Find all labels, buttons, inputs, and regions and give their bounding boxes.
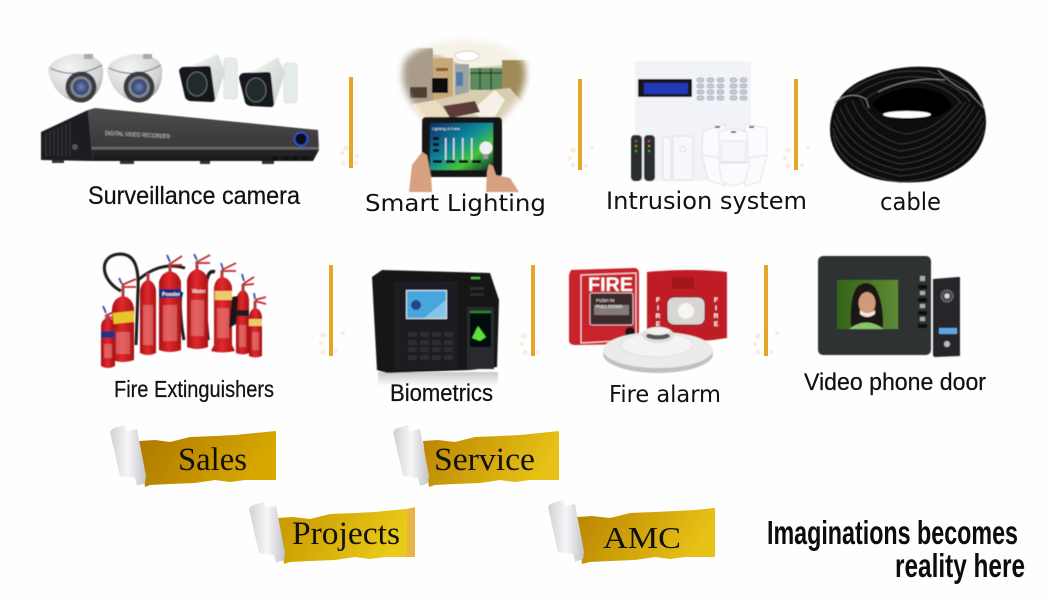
strobe horn (647, 270, 727, 342)
pull station (569, 268, 639, 345)
banner: Service (393, 425, 559, 487)
icon: dome camera 1 (48, 54, 103, 102)
strobe horn: R (656, 313, 661, 320)
strobe horn: F (714, 297, 718, 304)
caption: video phone door: Video phone door (804, 369, 986, 396)
banner: Projects: Projects (292, 516, 400, 552)
caption: intrusion system: Intrusion system (606, 187, 807, 215)
banner: AMC (548, 500, 715, 564)
icon: surveillance cameras and video recorder (41, 54, 319, 164)
banner: Projects (249, 502, 415, 564)
icon: intrusion alarm panel and sensors (631, 61, 767, 186)
extinguisher cylinders (101, 269, 262, 368)
door contact (663, 136, 693, 180)
strobe horn: I (715, 305, 717, 312)
room photo (398, 39, 530, 127)
caption: biometrics: Biometrics (390, 380, 493, 407)
pull station: PUSH IN (596, 298, 614, 303)
motion sensors (702, 124, 767, 186)
banner: Sales: Sales (178, 442, 247, 478)
icon: fire extinguishers (101, 254, 266, 368)
biometric keypad (408, 332, 453, 360)
icon: bullet camera 2 (239, 57, 297, 107)
alarm panel (635, 61, 751, 181)
divider 5 with bubbles (520, 265, 540, 356)
banner: Sales (110, 425, 276, 487)
strobe horn: F (656, 297, 660, 304)
caption: fire alarm: Fire alarm (609, 382, 721, 408)
tablet (422, 117, 502, 177)
icon: digital video recorder (41, 108, 319, 164)
remote fobs (631, 135, 655, 181)
extinguisher labels: Powder (162, 292, 180, 298)
icon: dome camera 2 (107, 54, 162, 102)
icon: fire alarm devices (569, 268, 727, 373)
icon: bullet camera 1 (179, 54, 237, 102)
pull station: FIRE (588, 275, 633, 296)
extinguisher necks and levers (103, 254, 266, 320)
banner: Service: Service (434, 442, 535, 478)
icon: digital video recorder: DIGITAL VIDEO RECORDER (105, 131, 171, 140)
extinguisher labels (101, 289, 262, 358)
hoses (104, 254, 215, 345)
pull station: PULL DOWN (596, 304, 623, 309)
strobe horn: I (657, 305, 659, 312)
caption: fire extinguishers: Fire Extinguishers (114, 376, 274, 402)
divider 3 with bubbles (783, 79, 810, 170)
biometric screen (406, 290, 447, 319)
monitor (818, 256, 931, 355)
tablet: Lighting & Fans (432, 126, 460, 131)
banner: AMC: AMC (603, 520, 681, 555)
extinguisher labels: Water (192, 289, 206, 295)
icon: smart lighting room and tablet (395, 35, 535, 192)
smoke detector (603, 327, 713, 373)
caption: cable: cable (880, 188, 941, 216)
strobe horn: E (714, 321, 719, 328)
caption: smart lighting: Smart Lighting (365, 191, 546, 217)
icon: biometric terminal (372, 270, 499, 386)
divider 2 with bubbles (568, 79, 594, 170)
strobe horn: E (656, 321, 661, 328)
divider 4 with bubbles (319, 265, 345, 356)
icon: cable coil (830, 67, 986, 182)
fingerprint reader (467, 307, 494, 369)
icon: video door phone (818, 256, 960, 357)
tagline (767, 514, 1025, 584)
hands (409, 152, 519, 192)
strobe horn: R (714, 313, 719, 320)
divider 6 with bubbles (753, 265, 779, 356)
caption: surveillance camera: Surveillance camera (88, 182, 300, 210)
divider 1 with bubbles (340, 77, 359, 168)
door station (933, 277, 960, 357)
